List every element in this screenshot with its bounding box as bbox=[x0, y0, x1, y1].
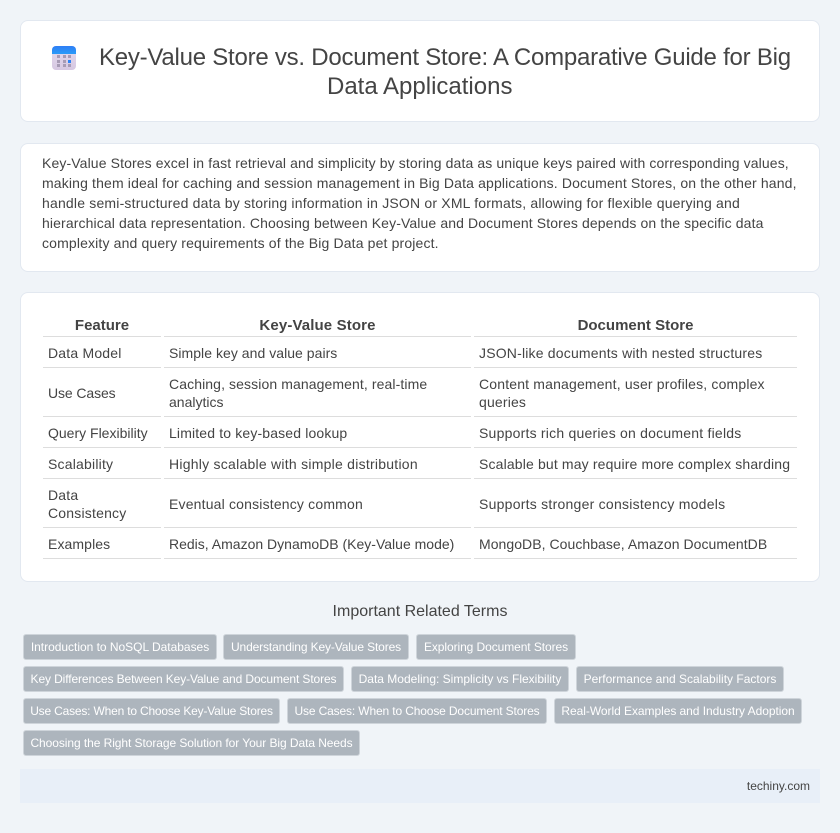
examples document: MongoDB, Couchbase, Amazon DocumentDB bbox=[479, 536, 767, 552]
table header: document store: Document Store bbox=[578, 317, 693, 334]
data consistency key-value: Eventual consistency common bbox=[169, 496, 363, 512]
title: Key-Value Store vs. Document Store: A Comparative Guide for Big bbox=[99, 44, 791, 71]
tag: Key Differences Between Key-Value and Document Stores bbox=[31, 672, 336, 686]
tag: Understanding Key-Value Stores bbox=[231, 640, 401, 654]
row: data consistency: Data bbox=[48, 487, 78, 503]
related terms heading: Important Related Terms bbox=[333, 603, 507, 620]
tag: Use Cases: When to Choose Document Stores bbox=[294, 704, 540, 718]
tag bbox=[576, 666, 784, 692]
tag bbox=[23, 634, 217, 660]
tag: Data Modeling: Simplicity vs Flexibility bbox=[359, 672, 561, 686]
intro text: Key-Value Stores excel in fast retrieval and simplicity by storing data as unique keys paired with corresponding values, bbox=[42, 155, 789, 171]
row: data consistency bbox=[48, 487, 126, 521]
tag bbox=[23, 698, 280, 724]
icon: calendar grid bbox=[52, 46, 76, 70]
tag bbox=[351, 666, 569, 692]
tag: Use Cases: When to Choose Key-Value Stores bbox=[30, 704, 273, 718]
footer credit: techiny.com bbox=[747, 779, 810, 793]
use cases key-value bbox=[169, 376, 427, 410]
tag: Performance and Scalability Factors bbox=[584, 672, 776, 686]
intro text: making them ideal for caching and session management in Big Data applications. Document Stores, on the other hand, bbox=[42, 175, 797, 191]
examples key-value: Redis, Amazon DynamoDB (Key-Value mode) bbox=[169, 536, 454, 552]
data consistency document: Supports stronger consistency models bbox=[479, 496, 725, 512]
tag bbox=[23, 666, 344, 692]
tag bbox=[223, 634, 409, 660]
tag bbox=[554, 698, 802, 724]
intro text: hierarchical data representation. Choosing between Key-Value and Document Stores depends on the specific data bbox=[42, 215, 764, 231]
panel: intro bbox=[20, 143, 820, 272]
data model key-value: Simple key and value pairs bbox=[169, 345, 337, 361]
row: examples: Examples bbox=[48, 536, 110, 552]
tag: Real-World Examples and Industry Adoption bbox=[561, 704, 795, 718]
use cases document: queries bbox=[479, 394, 526, 410]
use cases document bbox=[479, 376, 765, 410]
scalability document: Scalable but may require more complex sharding bbox=[479, 456, 790, 472]
title line 2: Data Applications bbox=[327, 73, 512, 100]
footer bar bbox=[20, 769, 820, 803]
header card bbox=[20, 20, 820, 122]
query flexibility document: Supports rich queries on document fields bbox=[479, 425, 742, 441]
tag bbox=[23, 730, 360, 756]
scalability key-value: Highly scalable with simple distribution bbox=[169, 456, 418, 472]
query flexibility key-value: Limited to key-based lookup bbox=[169, 425, 347, 441]
tag: Choosing the Right Storage Solution for Your Big Data Needs bbox=[30, 736, 353, 750]
row: use cases: Use Cases bbox=[48, 385, 116, 401]
table header: key-value store: Key-Value Store bbox=[259, 317, 376, 334]
table header: feature: Feature bbox=[75, 317, 129, 334]
row: scalability: Scalability bbox=[48, 456, 113, 472]
tag: Exploring Document Stores bbox=[424, 640, 568, 654]
intro text: handle semi-structured data by storing information in JSON or XML formats, allowing for flexible querying and bbox=[42, 195, 740, 211]
tags: related terms bbox=[23, 634, 802, 756]
panel: comparison table bbox=[20, 292, 820, 582]
row: data consistency: Consistency bbox=[48, 505, 126, 521]
tag: Introduction to NoSQL Databases bbox=[31, 640, 209, 654]
intro text bbox=[42, 155, 797, 251]
tag bbox=[416, 634, 576, 660]
row: data model: Data Model bbox=[48, 345, 122, 361]
row: query flexibility: Query Flexibility bbox=[48, 425, 148, 441]
intro text: complexity and query requirements of the Big Data pet project. bbox=[42, 235, 439, 251]
tag bbox=[287, 698, 547, 724]
use cases key-value: Caching, session management, real-time bbox=[169, 376, 427, 392]
data model document: JSON-like documents with nested structures bbox=[479, 345, 762, 361]
use cases document: Content management, user profiles, complex bbox=[479, 376, 765, 392]
use cases key-value: analytics bbox=[169, 394, 223, 410]
